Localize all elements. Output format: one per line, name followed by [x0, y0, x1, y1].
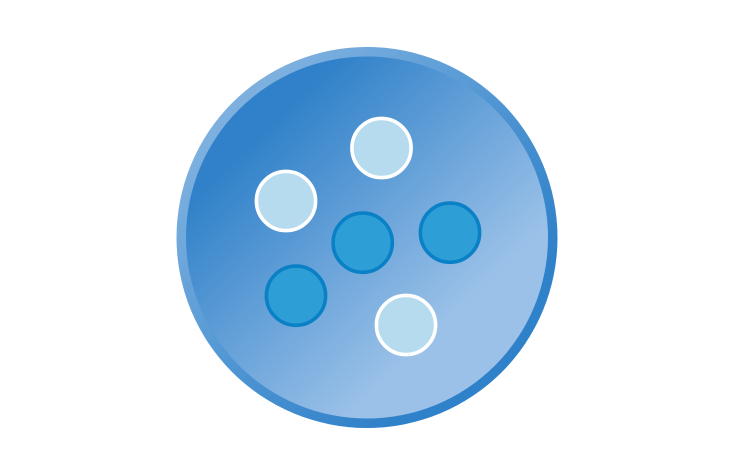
- dark cell: centre: [333, 213, 392, 272]
- light cell: bottom: [376, 295, 436, 355]
- light cells: [256, 118, 436, 355]
- dish inner surface: [186, 56, 548, 418]
- dish outer ring: [176, 47, 558, 428]
- dark cells: [266, 203, 480, 325]
- light cell: top: [352, 118, 411, 178]
- light cell: left: [256, 171, 316, 231]
- dark cell: right: [420, 203, 480, 262]
- dark cell: lower left: [266, 266, 326, 325]
